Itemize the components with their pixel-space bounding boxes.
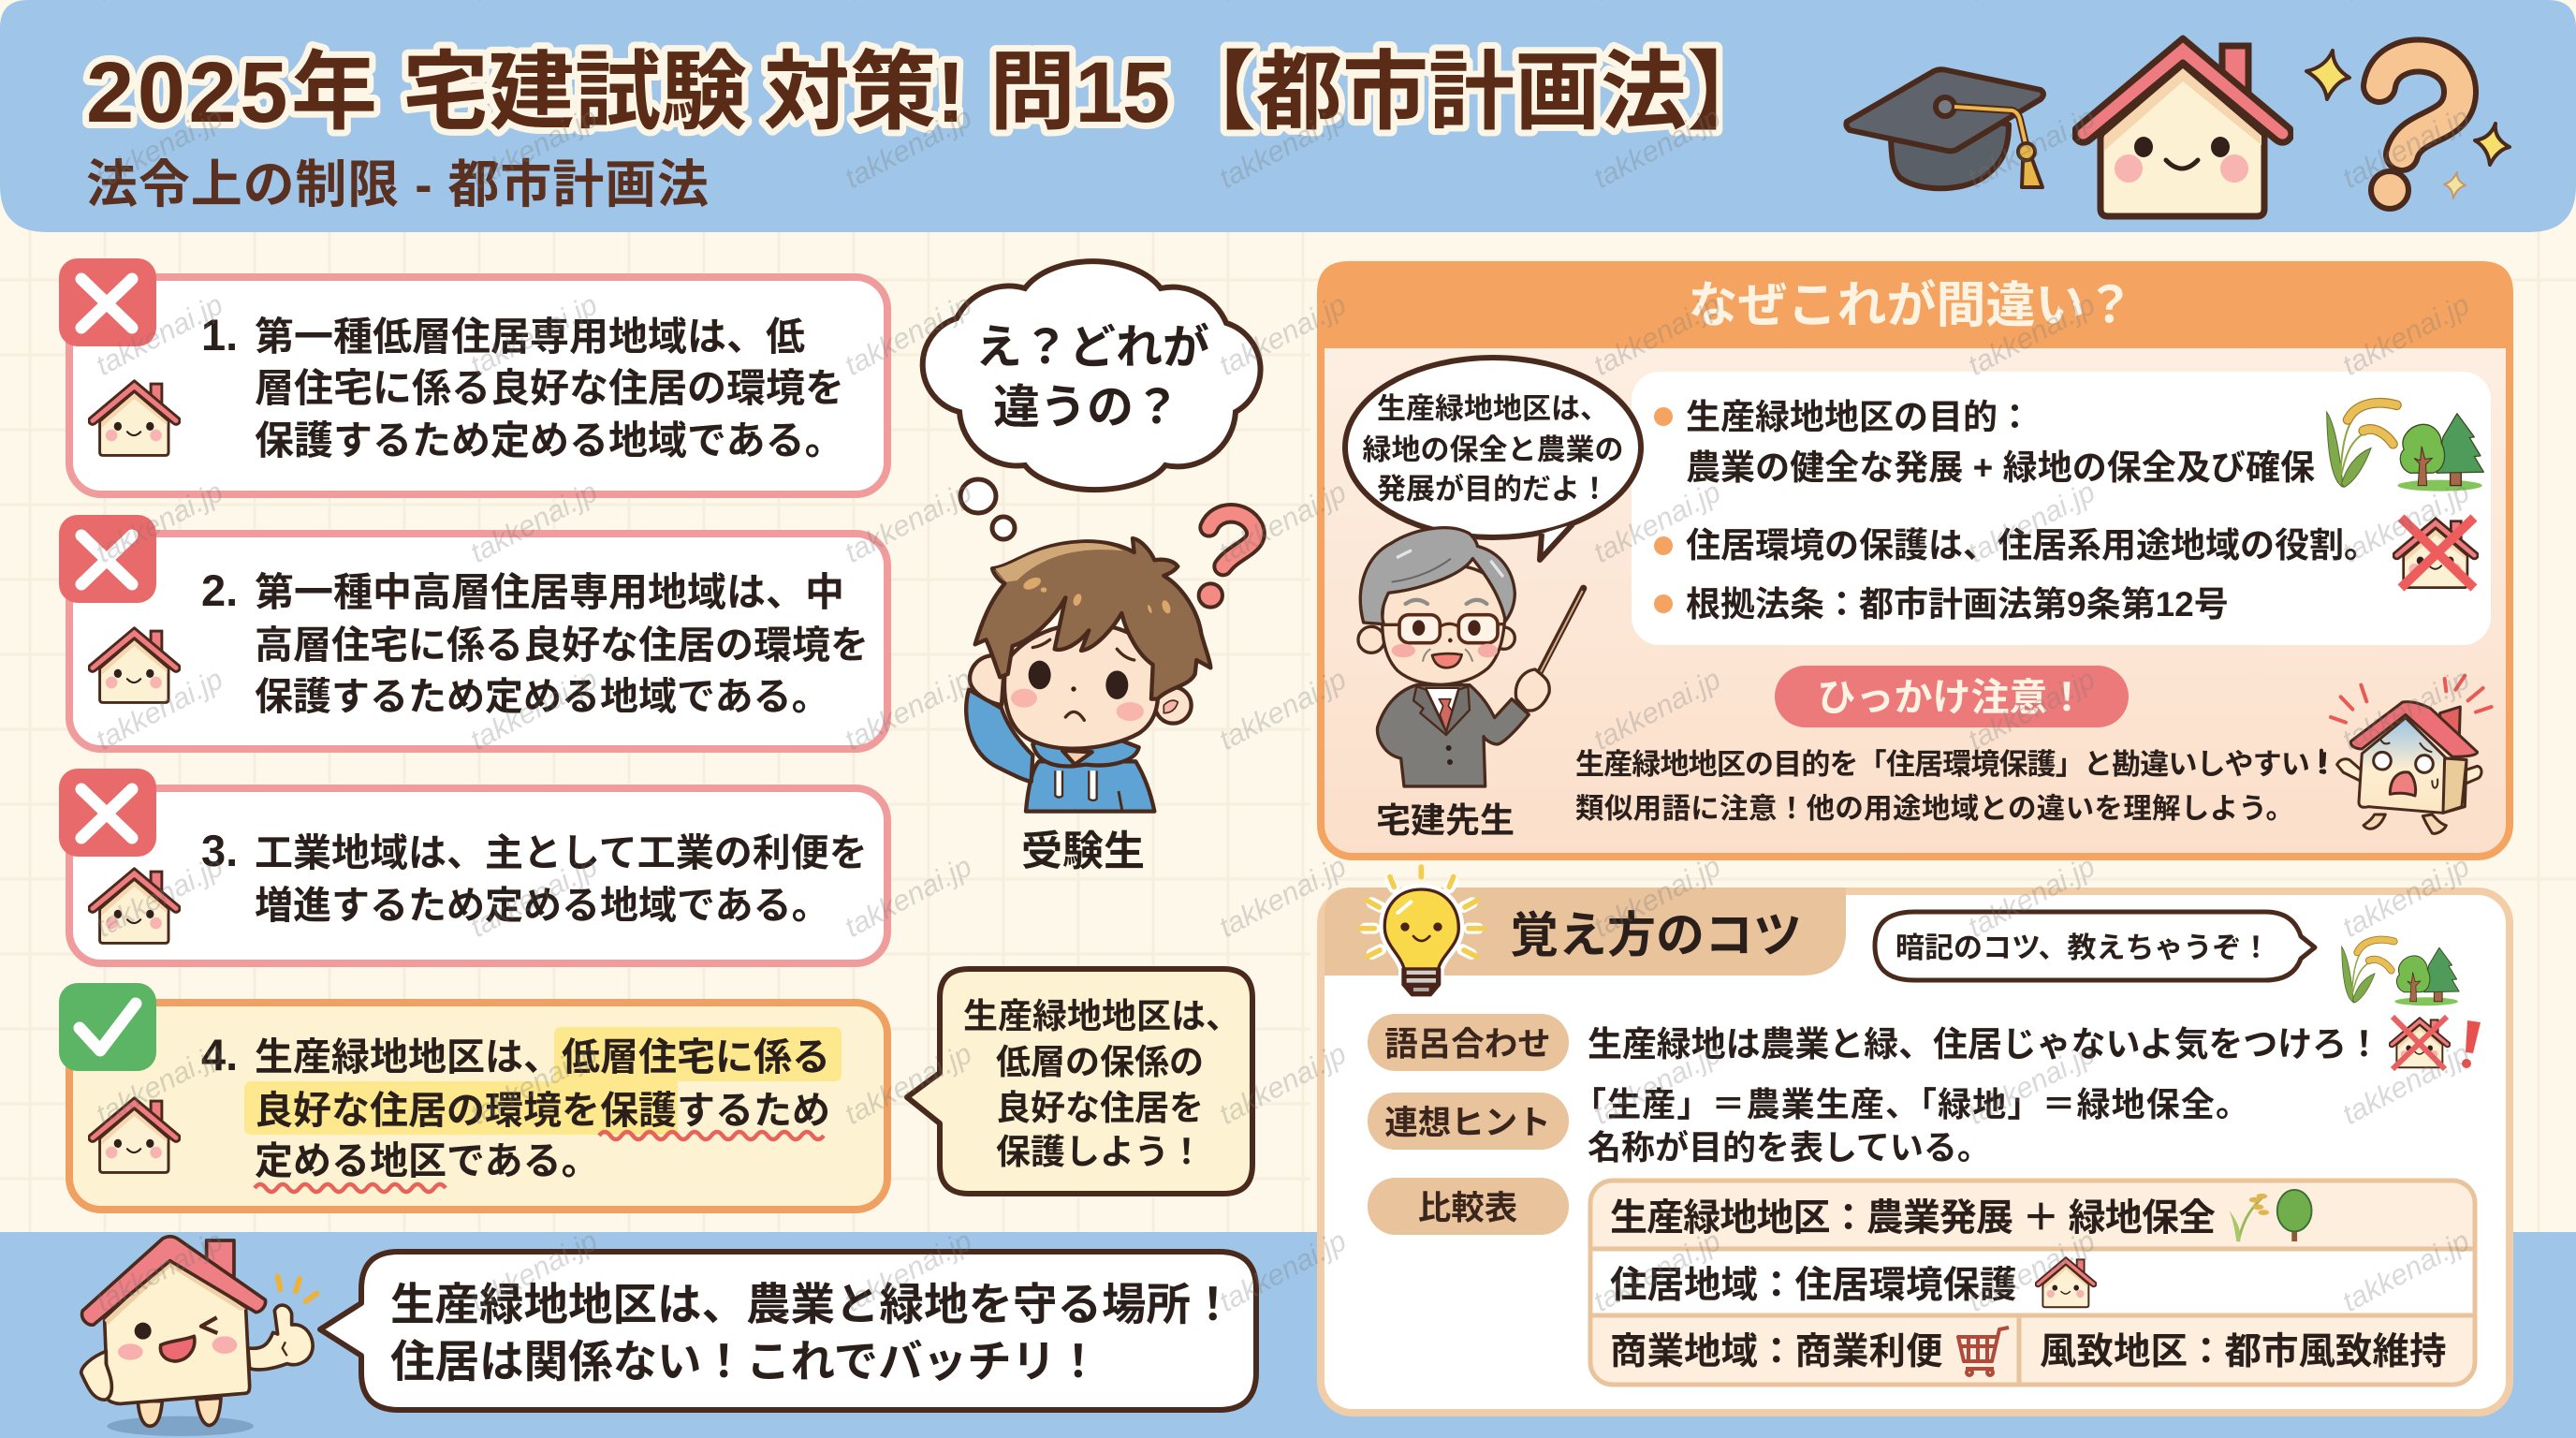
row: commercial: 商業地域：商業利便 (1610, 1331, 1943, 1372)
subtitle: 法令上の制限 - 都市計画法 (86, 155, 709, 213)
row: production green (1610, 1190, 2312, 1241)
title: 宅建試験 (402, 45, 747, 140)
statement text 3 (201, 826, 868, 927)
watermark: takkenai.jp (1588, 1036, 1726, 1131)
watermark: takkenai.jp (90, 1036, 228, 1131)
statement text 1: 層住宅に係る良好な住居の環境を (255, 366, 844, 410)
icon: smiling house (2074, 38, 2291, 216)
watermark: takkenai.jp (1962, 100, 2100, 195)
watermark: takkenai.jp (1588, 849, 1726, 944)
statement text 3: 増進するため定める地域である。 (255, 884, 830, 927)
statement text 4 (201, 1030, 830, 1182)
warning pill (1775, 666, 2129, 727)
watermark: takkenai.jp (839, 662, 977, 756)
title: 問15 (989, 45, 1170, 140)
watermark: takkenai.jp (90, 100, 228, 195)
speech bubble: student tip: 良好な住居を (996, 1089, 1204, 1127)
tip: association text (1573, 1085, 2249, 1167)
title: 【都市計画法】 (1170, 45, 1773, 140)
tip label: association (1368, 1093, 1569, 1150)
speech bubble: summary: 住居は関係ない！これでバッチリ！ (390, 1338, 1101, 1387)
statement text 2 (201, 565, 869, 718)
watermark: takkenai.jp (464, 1224, 603, 1318)
comparison table (1590, 1181, 2475, 1385)
statement text 4: 4. (201, 1030, 238, 1079)
thought bubble: 違うの？ (993, 381, 1180, 433)
question mark (1199, 513, 1255, 608)
row: production green: 生産緑地地区：農業発展 ＋ 緑地保全 (1610, 1197, 2216, 1239)
speech bubble: summary: 生産緑地地区は、農業と緑地を守る場所！ (390, 1281, 1236, 1330)
watermark: takkenai.jp (1213, 475, 1352, 569)
header band (0, 0, 2576, 232)
statement card 4 correct (59, 983, 887, 1210)
watermark: takkenai.jp (1962, 849, 2100, 944)
character: teacher bubble (1345, 358, 1641, 560)
watermark: takkenai.jp (839, 287, 977, 382)
statement text 1: 保護するため定める地域である。 (255, 418, 844, 462)
statement card 1 (59, 258, 887, 494)
watermark: takkenai.jp (1213, 1036, 1352, 1131)
bullet list: 住居環境の保護は、住居系用途地域の役割。 (1686, 526, 2378, 565)
watermark: takkenai.jp (1962, 1036, 2100, 1131)
warning text: 類似用語に注意！他の用途地域との違いを理解しよう。 (1575, 793, 2294, 825)
icon: sparkles (2306, 51, 2510, 198)
highlights (244, 1027, 842, 1135)
statement text 4: 生産緑地地区は、低層住宅に係る (255, 1035, 830, 1078)
bullet list: 根拠法条：都市計画法第9条第12号 (1686, 585, 2229, 624)
white info box (1632, 372, 2491, 645)
statement text 1: 第一種低層住居専用地域は、低 (255, 315, 805, 359)
watermark: takkenai.jp (2336, 475, 2475, 569)
watermark: takkenai.jp (464, 662, 603, 756)
watermark: takkenai.jp (464, 849, 603, 944)
speech bubble: tips (1875, 912, 2315, 980)
badge: wrong (59, 515, 156, 603)
watermark: takkenai.jp (839, 1036, 977, 1131)
icon: scared house (2320, 676, 2492, 833)
character: house mascot thumbs up (81, 1237, 316, 1436)
watermark: takkenai.jp (1588, 475, 1726, 569)
label: teacher: 宅建先生 (1376, 801, 1515, 840)
character: teacher bubble: 緑地の保全と農業の (1363, 433, 1623, 466)
warning pill: ひっかけ注意！ (1818, 676, 2086, 719)
icon: crossed house (2393, 518, 2478, 588)
character: teacher bubble: 発展が目的だよ！ (1377, 473, 1609, 506)
tip label: mnemonic (1368, 1014, 1569, 1071)
label: student: 受験生 (1021, 829, 1145, 874)
watermark: takkenai.jp (2336, 662, 2475, 756)
watermark: takkenai.jp (2336, 100, 2475, 195)
statement text 4: 良好な住居の環境を保護するため (255, 1089, 830, 1132)
statement text 1: 1. (201, 310, 238, 360)
watermark: takkenai.jp (1588, 287, 1726, 382)
title: 対策! (764, 45, 965, 140)
statement card 3 (59, 769, 887, 963)
watermark: takkenai.jp (1213, 1224, 1352, 1318)
character: teacher (1358, 528, 1584, 786)
speech bubble: student tip: 生産緑地地区は、 (963, 997, 1240, 1035)
tips heading: 覚え方のコツ (1510, 909, 1802, 963)
icon: house (89, 1098, 180, 1172)
statement card 2 (59, 515, 887, 749)
watermark: takkenai.jp (1213, 100, 1352, 195)
watermark: takkenai.jp (2336, 1224, 2475, 1318)
watermark: takkenai.jp (2336, 1036, 2475, 1131)
watermark: takkenai.jp (464, 100, 603, 195)
watermark: takkenai.jp (464, 287, 603, 382)
row: scenic: 風致地区：都市風致維持 (2040, 1331, 2447, 1372)
tip label: comparison (1368, 1178, 1569, 1235)
bullet list: 生産緑地地区の目的： (1686, 398, 2032, 436)
icon: house (89, 869, 180, 943)
row: residential: 住居地域：住居環境保護 (1610, 1265, 2016, 1306)
speech bubble: student tip: 低層の保係の (996, 1043, 1204, 1081)
wavy underlines (255, 1132, 824, 1192)
watermark: takkenai.jp (1213, 662, 1352, 756)
speech bubble: tips: 暗記のコツ、教えちゃうぞ！ (1895, 932, 2271, 964)
badge: correct (59, 983, 156, 1071)
bullet list: 農業の健全な発展 + 緑地の保全及び確保 (1686, 448, 2315, 487)
tip: association text: 「生産」＝農業生産、「緑地」＝緑地保全。 (1573, 1085, 2249, 1123)
icon: rice and trees (2327, 403, 2483, 492)
character: student (966, 513, 1255, 812)
tip: mnemonic text: 生産緑地は農業と緑、住居じゃないよ気をつけろ！ (1588, 1025, 2381, 1064)
watermark: takkenai.jp (839, 849, 977, 944)
watermark: takkenai.jp (839, 475, 977, 569)
statement text 2: 保護するため定める地域である。 (255, 675, 830, 718)
warning text (1575, 748, 2338, 825)
watermark: takkenai.jp (1213, 287, 1352, 382)
statement text 3: 3. (201, 826, 238, 875)
icon: question mark (2371, 55, 2460, 209)
panel: memorization tips (1321, 867, 2510, 1413)
statement text 2: 第一種中高層住居専用地域は、中 (255, 570, 844, 614)
statement text 4: 定める地区である。 (255, 1139, 600, 1182)
title: 2025年 (86, 45, 377, 140)
badge: wrong (59, 769, 156, 857)
icon: graduation cap (1846, 69, 2043, 188)
tips heading tab (1325, 888, 1846, 976)
icon: house (89, 381, 180, 455)
statement text 2: 高層住宅に係る良好な住居の環境を (255, 624, 869, 667)
watermark: takkenai.jp (464, 475, 603, 569)
panel: why it's wrong (1317, 261, 2513, 857)
watermark: takkenai.jp (90, 475, 228, 569)
thought bubble (923, 261, 1261, 539)
icon: light bulb (1360, 867, 1484, 995)
icon: house (89, 628, 180, 702)
watermark: takkenai.jp (90, 849, 228, 944)
watermark: takkenai.jp (1588, 100, 1726, 195)
statement text 2: 2. (201, 565, 238, 615)
watermark: takkenai.jp (2336, 849, 2475, 944)
watermark: takkenai.jp (90, 287, 228, 382)
watermark: takkenai.jp (839, 100, 977, 195)
row: residential (1610, 1257, 2096, 1307)
watermark: takkenai.jp (839, 1224, 977, 1318)
watermark: takkenai.jp (1962, 662, 2100, 756)
statement text 3: 工業地域は、主として工業の利便を (255, 831, 868, 874)
watermark: takkenai.jp (1962, 1224, 2100, 1318)
character: teacher bubble: 生産緑地地区は、 (1377, 392, 1609, 425)
speech bubble: student tip (907, 969, 1252, 1194)
watermark: takkenai.jp (464, 1036, 603, 1131)
tip label: association: 連想ヒント (1384, 1104, 1551, 1141)
tip label: comparison: 比較表 (1418, 1189, 1517, 1226)
watermark: takkenai.jp (2336, 287, 2475, 382)
thought bubble: え？どれが (975, 321, 1209, 374)
watermark: takkenai.jp (1588, 662, 1726, 756)
icon: rice and trees (2342, 940, 2459, 1005)
tip: association text: 名称が目的を表している。 (1588, 1128, 1991, 1167)
statement text 1 (201, 310, 844, 462)
watermark: takkenai.jp (90, 1224, 228, 1318)
bullet list (1654, 398, 2378, 624)
tip label: mnemonic: 語呂合わせ (1384, 1025, 1551, 1063)
speech bubble: student tip: 保護しよう！ (996, 1133, 1204, 1171)
warning text: 生産緑地地区の目的を「住居環境保護」と勘違いしやすい！ (1575, 748, 2338, 781)
watermark: takkenai.jp (1588, 1224, 1726, 1318)
badge: wrong (59, 258, 156, 346)
watermark: takkenai.jp (1962, 287, 2100, 382)
watermark: takkenai.jp (1962, 475, 2100, 569)
panel heading: なぜこれが間違い？ (1689, 278, 2134, 333)
icon: crossed house and exclamation (2390, 1017, 2481, 1069)
watermark: takkenai.jp (1213, 849, 1352, 944)
speech bubble: summary (320, 1252, 1256, 1410)
watermark: takkenai.jp (90, 662, 228, 756)
